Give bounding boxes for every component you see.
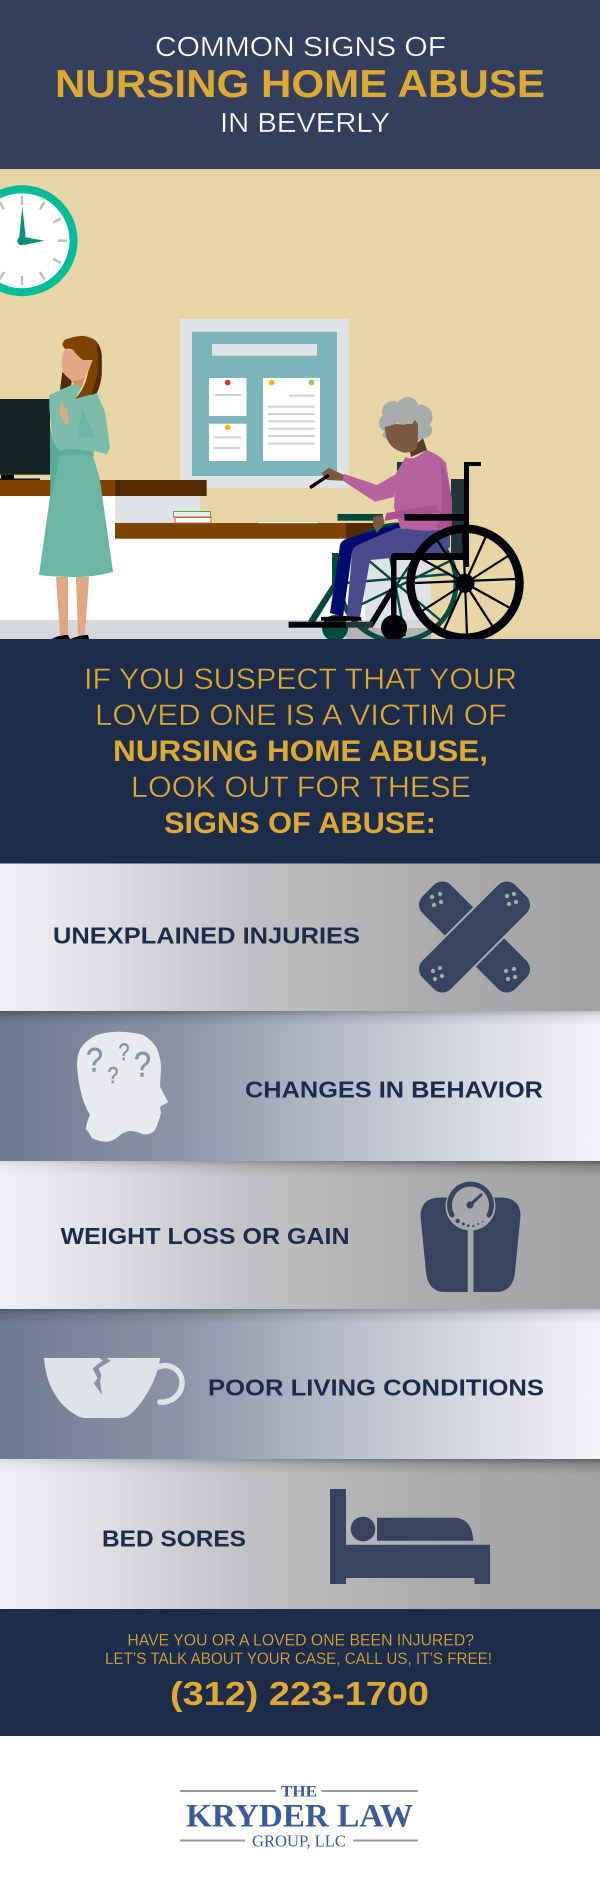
icon: head with question marks: ? xyxy=(134,1046,151,1085)
label: CHANGES IN BEHAVIOR xyxy=(245,1077,543,1103)
panel: poor living conditions xyxy=(0,1309,600,1459)
label: WEIGHT LOSS OR GAIN xyxy=(60,1223,350,1249)
bulletin board xyxy=(180,319,349,488)
desk and monitor xyxy=(0,399,383,539)
panel: weight loss or gain xyxy=(0,1161,600,1309)
panel: bed sores xyxy=(0,1459,600,1609)
intro line 1: IF YOU SUSPECT THAT YOUR xyxy=(84,663,517,696)
intro line 2: LOVED ONE IS A VICTIM OF xyxy=(95,699,507,732)
hair behind xyxy=(60,372,72,390)
icon: head with question marks: ? xyxy=(118,1039,130,1066)
icon: broken cup xyxy=(44,1358,182,1418)
icon: wall clock xyxy=(0,189,74,292)
panel: footer logo xyxy=(0,1736,600,1895)
label: UNEXPLAINED INJURIES xyxy=(53,922,360,948)
icon: bed xyxy=(330,1489,490,1584)
intro line 5: SIGNS OF ABUSE: xyxy=(164,807,436,840)
logo: the: THE xyxy=(281,1784,317,1801)
panel: changes in behavior xyxy=(0,1011,600,1161)
icon: weighing scale xyxy=(420,1182,520,1292)
icon: crossed bandages xyxy=(413,875,536,999)
panel: unexplained injuries xyxy=(0,864,600,1012)
woman in green dress xyxy=(39,336,113,639)
icon: head with question marks: ? xyxy=(86,1042,103,1080)
wheelchair front frame xyxy=(289,462,520,641)
call to action line 2: LET’S TALK ABOUT YOUR CASE, CALL US, IT’S FREE! xyxy=(105,1649,492,1668)
logo: kryder law: KRYDER LAW xyxy=(186,1799,413,1835)
icon: head with question marks: ? xyxy=(108,1062,118,1088)
title line 2: NURSING HOME ABUSE xyxy=(55,63,545,106)
title line 3: IN BEVERLY xyxy=(220,107,390,138)
intro line 3: NURSING HOME ABUSE, xyxy=(113,735,488,768)
call to action line 1: HAVE YOU OR A LOVED ONE BEEN INJURED? xyxy=(127,1630,474,1649)
title line 1: COMMON SIGNS OF xyxy=(155,31,446,62)
phone number: (312) 223-1700 xyxy=(170,1675,429,1712)
panel: header xyxy=(0,0,600,169)
icon: head with question marks xyxy=(77,1032,168,1142)
panel: intro statement xyxy=(0,639,600,864)
wheelchair xyxy=(308,462,464,641)
elderly woman seated xyxy=(310,397,452,621)
panel: nursing home illustration xyxy=(0,169,600,641)
intro line 4: LOOK OUT FOR THESE xyxy=(131,771,471,804)
panel: call to action xyxy=(0,1609,600,1736)
label: BED SORES xyxy=(102,1526,246,1552)
logo: group llc: GROUP, LLC xyxy=(252,1832,346,1851)
label: POOR LIVING CONDITIONS xyxy=(208,1375,544,1401)
